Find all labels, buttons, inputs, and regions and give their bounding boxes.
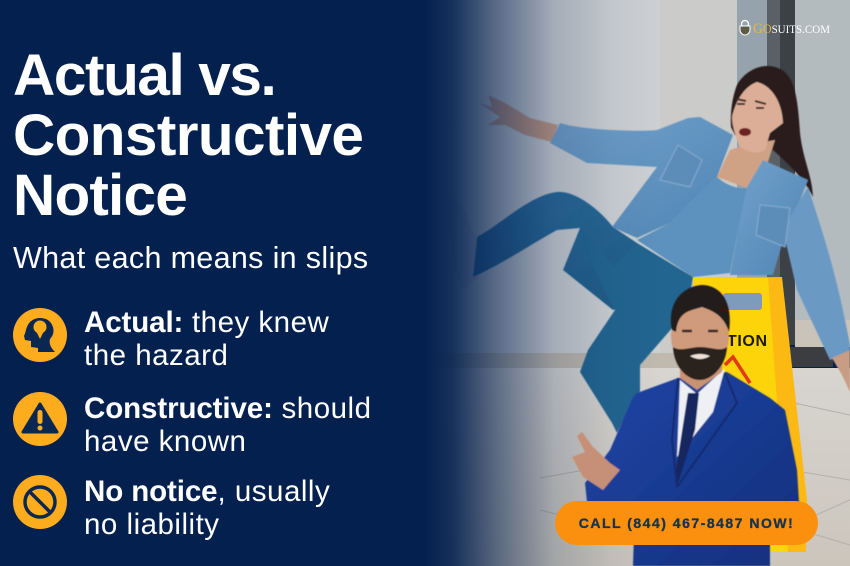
navy fade overlay (425, 0, 660, 566)
item: actual: Actual: they knew (84, 306, 329, 339)
shirt pocket (756, 205, 790, 247)
subtitle: What each means in slips (13, 241, 368, 275)
title: Actual vs. (13, 43, 275, 108)
item: no notice: no liability (84, 508, 220, 541)
right sleeve (783, 187, 850, 360)
pointing hand (572, 432, 620, 490)
shirt pocket left (660, 145, 702, 187)
caution sign (693, 277, 807, 552)
attorney (572, 285, 799, 566)
hand (479, 95, 558, 142)
hair (731, 66, 813, 197)
tie (676, 393, 699, 483)
smile (690, 354, 710, 359)
mouth (739, 128, 751, 136)
sign lettering: TION (727, 333, 767, 350)
lapels (672, 373, 737, 487)
shoe (445, 199, 481, 290)
sign hazard mark (725, 357, 750, 383)
logo text: GOSUITS.COM (753, 21, 830, 37)
title (13, 43, 363, 228)
shirt right panel (730, 160, 808, 275)
item: constructive (84, 392, 371, 458)
item: no notice (84, 475, 330, 541)
face (671, 302, 729, 370)
item: constructive: have known (84, 425, 246, 458)
tee (637, 177, 747, 277)
item: actual (84, 306, 329, 372)
beard (673, 347, 727, 380)
shirt collar (677, 368, 725, 457)
title: Notice (13, 163, 187, 228)
denim shirt sleeve and body (550, 117, 733, 238)
neck (680, 355, 722, 390)
front leg jeans (580, 228, 693, 433)
item: constructive: Constructive: should (84, 392, 371, 425)
logo: shield lock (740, 20, 830, 37)
eyes and brows (736, 99, 766, 108)
call to action button (555, 501, 818, 545)
icon: head with idea (13, 308, 67, 362)
back leg jeans (473, 192, 640, 310)
face (732, 82, 783, 153)
room background (400, 0, 850, 566)
icon: warning triangle (13, 392, 67, 446)
eyes (682, 330, 718, 332)
title: Constructive (13, 103, 363, 168)
woman slipping (445, 66, 850, 433)
item: actual: the hazard (84, 339, 228, 372)
item: no notice: No notice, usually (84, 475, 330, 508)
suit (585, 372, 799, 566)
neck and chest (717, 140, 775, 188)
hand right (832, 350, 850, 392)
call to action button: CALL (844) 467-8487 NOW! (579, 515, 794, 531)
icon: prohibition sign (13, 475, 67, 529)
hair (671, 285, 730, 332)
